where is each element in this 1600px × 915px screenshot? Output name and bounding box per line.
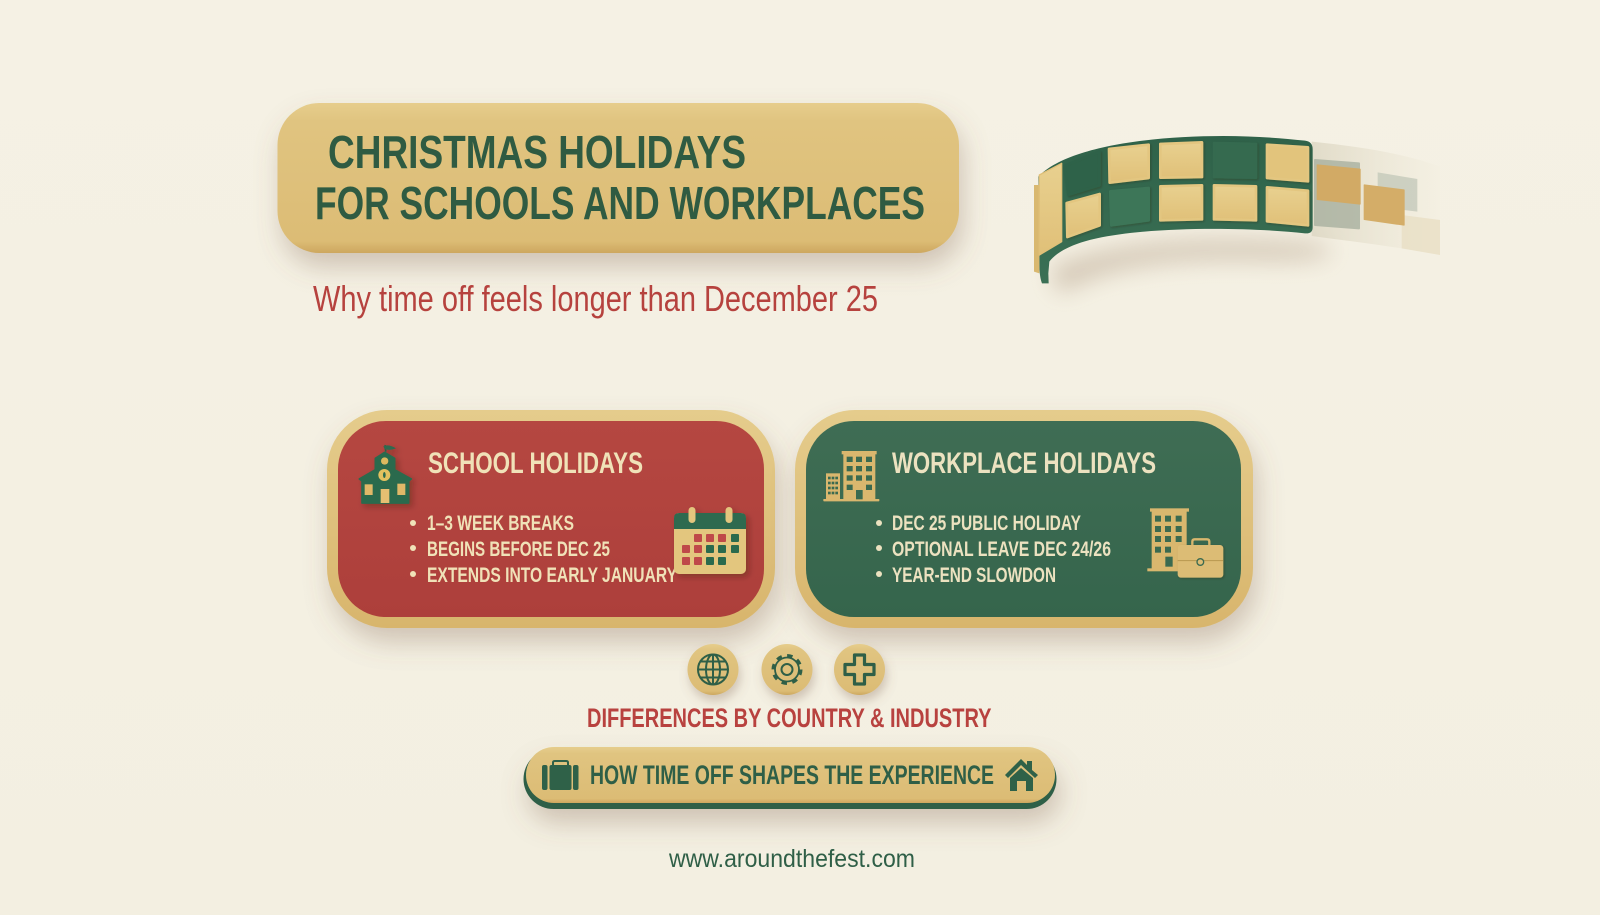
dark tiles bbox=[1065, 143, 1256, 225]
panel: school holidays bbox=[327, 410, 775, 628]
icon: suitcase bbox=[542, 761, 578, 790]
bullet list bbox=[410, 512, 677, 587]
icon: globe bbox=[688, 644, 738, 695]
card fill bbox=[338, 421, 764, 617]
title text bbox=[315, 126, 925, 229]
banner base bbox=[524, 749, 1056, 809]
banner: experience bbox=[524, 747, 1056, 809]
banner text: HOW TIME OFF SHAPES THE EXPERIENCE bbox=[590, 760, 994, 790]
bullet list bbox=[876, 512, 1111, 587]
title text: FOR SCHOOLS AND WORKPLACES bbox=[315, 177, 925, 229]
bullet list: YEAR-END SLOWDON bbox=[892, 564, 1056, 587]
bullet list: BEGINS BEFORE DEC 25 bbox=[427, 538, 610, 561]
heading: SCHOOL HOLIDAYS bbox=[428, 447, 643, 480]
icon: house bbox=[1005, 759, 1038, 791]
card frame bbox=[795, 410, 1253, 628]
title text: CHRISTMAS HOLIDAYS bbox=[328, 126, 746, 178]
green curved band bbox=[1038, 136, 1313, 283]
icon: calendar bbox=[674, 507, 746, 574]
heading: WORKPLACE HOLIDAYS bbox=[892, 447, 1156, 480]
icon: office and briefcase bbox=[1147, 508, 1223, 578]
subtitle: Why time off feels longer than December 25 bbox=[313, 278, 878, 319]
left edge gold tiles bbox=[1034, 185, 1039, 273]
calendar strip illustration bbox=[1034, 136, 1440, 293]
strip shadow bbox=[1050, 240, 1332, 293]
bullet list: DEC 25 PUBLIC HOLIDAY bbox=[892, 512, 1081, 535]
bullet list: EXTENDS INTO EARLY JANUARY bbox=[427, 564, 677, 587]
icon: plus bbox=[834, 644, 885, 695]
panel: workplace holidays bbox=[795, 410, 1253, 628]
icon: gear bbox=[762, 644, 812, 695]
card fill bbox=[806, 421, 1241, 617]
card frame bbox=[327, 410, 775, 628]
title banner bbox=[278, 103, 959, 253]
banner face bbox=[526, 747, 1055, 803]
icon: school building bbox=[359, 445, 411, 503]
bullet list: OPTIONAL LEAVE DEC 24/26 bbox=[892, 538, 1111, 561]
icon: office buildings bbox=[823, 451, 879, 501]
differences heading: DIFFERENCES BY COUNTRY & INDUSTRY bbox=[587, 703, 992, 733]
gold tiles bbox=[1067, 142, 1308, 237]
bullet list: 1–3 WEEK BREAKS bbox=[427, 512, 574, 535]
icon row: country and industry bbox=[688, 644, 885, 695]
website url: www.aroundthefest.com bbox=[668, 845, 915, 873]
fading ghost trail bbox=[1312, 142, 1440, 255]
